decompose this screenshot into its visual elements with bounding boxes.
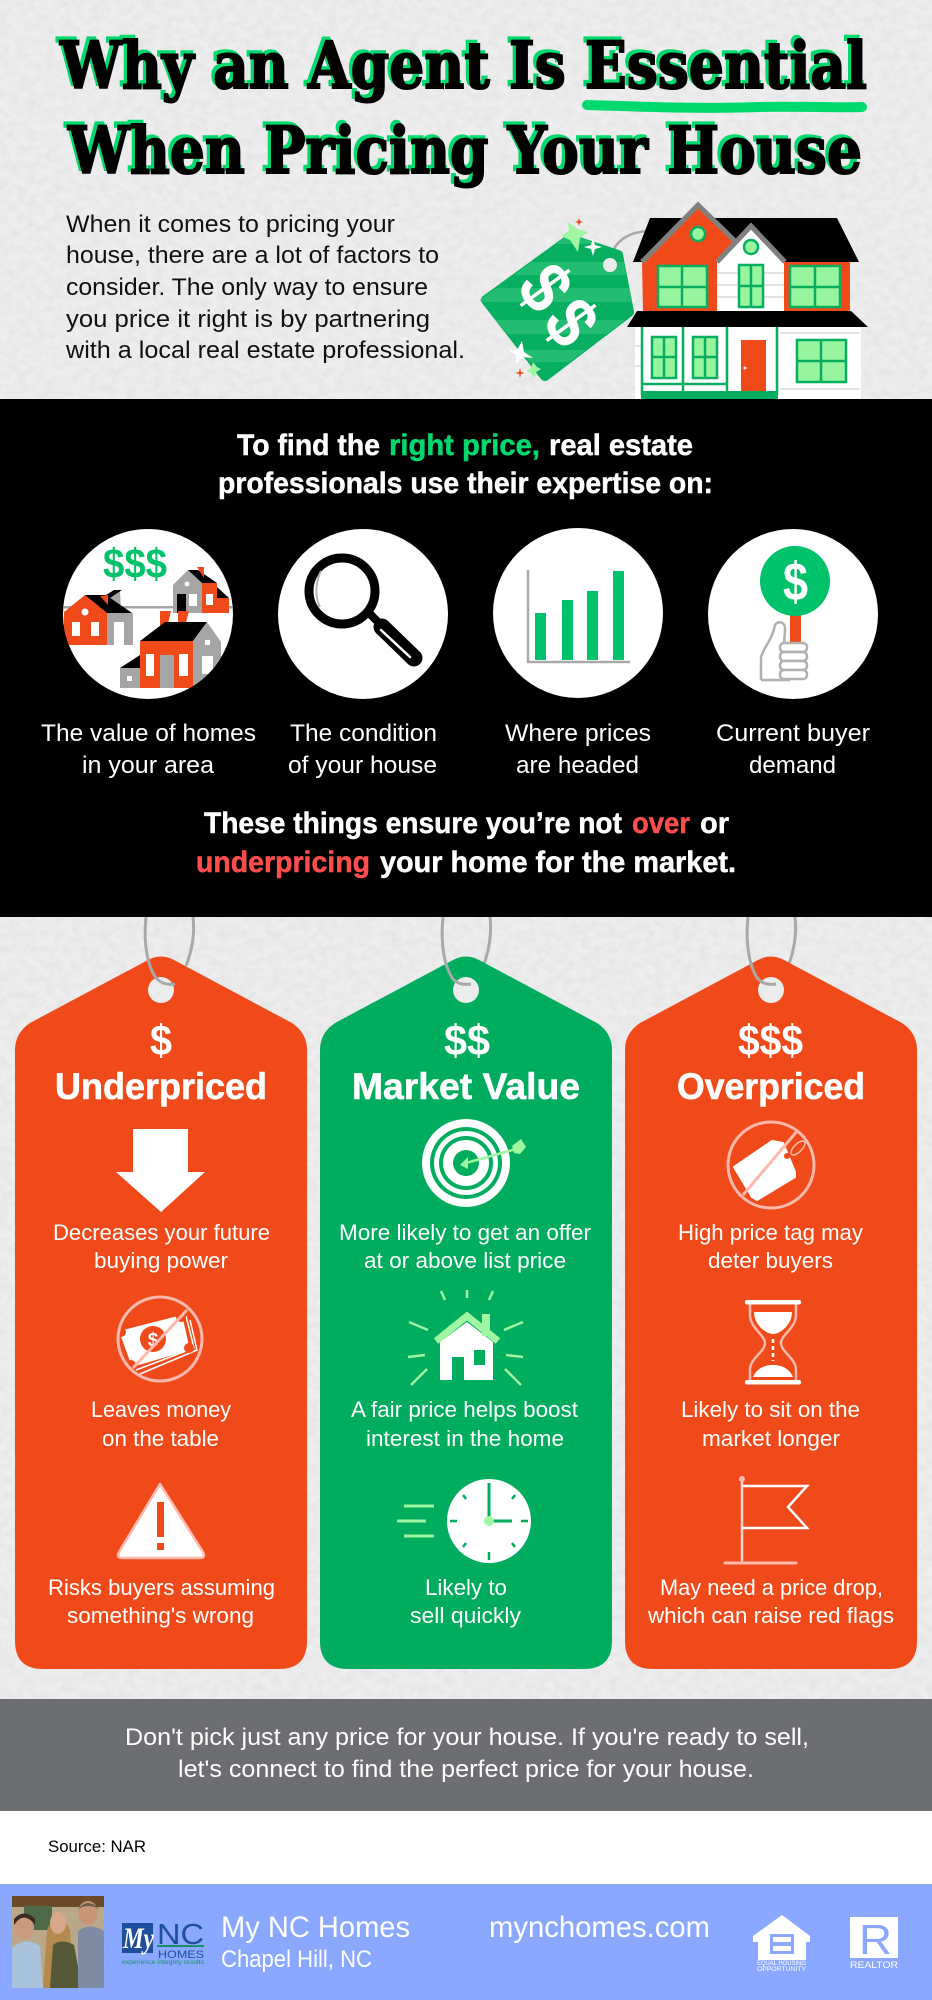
website: mynchomes.com bbox=[489, 1911, 710, 1944]
company logo bbox=[122, 1919, 204, 1966]
intro paragraph: with a local real estate professional. bbox=[65, 337, 465, 364]
icon: crossed out price tag bbox=[728, 1122, 814, 1208]
point 2 bbox=[681, 1397, 860, 1451]
company logo: experience·integrity·results bbox=[122, 1960, 204, 1966]
point 3: which can raise red flags bbox=[647, 1603, 894, 1628]
point 1 bbox=[53, 1220, 270, 1273]
point 3: Risks buyers assuming bbox=[48, 1575, 275, 1600]
company name: My NC Homes bbox=[221, 1911, 410, 1944]
panel: expertise bbox=[0, 399, 932, 917]
label bbox=[41, 720, 256, 779]
point 2 bbox=[91, 1397, 231, 1451]
label: are headed bbox=[516, 752, 639, 779]
heading: To find the bbox=[237, 429, 380, 462]
point 2: on the table bbox=[102, 1426, 219, 1451]
icon: equal housing opportunity bbox=[753, 1915, 810, 1973]
intro paragraph: consider. The only way to ensure bbox=[66, 274, 428, 301]
icon: hourglass bbox=[745, 1300, 801, 1384]
point 1: deter buyers bbox=[708, 1248, 833, 1273]
point 1: Decreases your future bbox=[53, 1220, 270, 1245]
source note: Source: NAR bbox=[48, 1837, 146, 1856]
point 2: interest in the home bbox=[366, 1426, 564, 1451]
call to action band: Don't pick just any price for your house. If you're ready to sell, bbox=[125, 1724, 809, 1751]
point 1 bbox=[678, 1220, 863, 1273]
icon: equal housing opportunity: EQUAL HOUSING bbox=[757, 1961, 806, 1967]
point 3: May need a price drop, bbox=[660, 1575, 883, 1600]
icon: clock with speed lines bbox=[397, 1479, 531, 1563]
price symbol: $$ bbox=[444, 1017, 490, 1065]
icon: neighbourhood homes bbox=[60, 529, 240, 699]
icon: hand holding dollar sign: $ bbox=[783, 552, 808, 612]
icon: warning triangle bbox=[118, 1484, 204, 1558]
location: Chapel Hill, NC bbox=[221, 1946, 372, 1973]
closing statement: over bbox=[632, 807, 690, 840]
heading: Underpriced bbox=[55, 1066, 267, 1107]
lower windows bbox=[652, 337, 846, 382]
point 3 bbox=[48, 1575, 275, 1628]
company logo: HOMES bbox=[158, 1949, 204, 1961]
icon: magnifying glass bbox=[278, 529, 448, 699]
point 2: A fair price helps boost bbox=[351, 1397, 578, 1422]
icon: crossed out money bbox=[116, 1297, 202, 1381]
icon: hand holding dollar sign bbox=[708, 529, 878, 699]
call to action band bbox=[0, 1699, 932, 1811]
label bbox=[716, 720, 870, 779]
icon: glowing house bbox=[408, 1290, 523, 1385]
footer band bbox=[0, 1884, 932, 2000]
heading: real estate bbox=[549, 429, 693, 462]
heading: Overpriced bbox=[677, 1066, 865, 1107]
title underline bbox=[587, 105, 862, 108]
point 3 bbox=[410, 1575, 521, 1628]
point 3: something's wrong bbox=[67, 1603, 254, 1628]
illustration: house bbox=[627, 205, 868, 400]
icon: realtor mark: R bbox=[859, 1916, 892, 1963]
label: demand bbox=[749, 752, 836, 779]
icon: target with arrow bbox=[422, 1119, 526, 1207]
point 3 bbox=[647, 1575, 894, 1628]
heading: professionals use their expertise on: bbox=[218, 467, 713, 500]
label: The value of homes bbox=[41, 720, 256, 747]
upper windows bbox=[658, 265, 840, 307]
icon: realtor mark bbox=[850, 1916, 899, 1970]
point 2: market longer bbox=[702, 1426, 840, 1451]
point 1 bbox=[339, 1220, 591, 1273]
point 2 bbox=[351, 1397, 578, 1451]
intro paragraph bbox=[65, 211, 465, 364]
icon: bar chart bbox=[493, 528, 663, 698]
illustration: price tag: $ bbox=[501, 248, 590, 326]
company logo: My bbox=[122, 1922, 155, 1955]
label: The condition bbox=[290, 720, 437, 747]
price symbol: $$$ bbox=[738, 1017, 803, 1065]
label bbox=[288, 720, 437, 779]
icon: red flag bbox=[725, 1476, 807, 1563]
closing statement: These things ensure you’re not bbox=[204, 807, 622, 840]
icon: realtor mark: REALTOR bbox=[850, 1960, 899, 1970]
point 1: at or above list price bbox=[364, 1248, 566, 1273]
intro paragraph: you price it right is by partnering bbox=[66, 306, 430, 333]
heading: Market Value bbox=[352, 1066, 580, 1107]
intro paragraph: When it comes to pricing your bbox=[66, 211, 395, 238]
title bbox=[56, 25, 867, 189]
point 1: High price tag may bbox=[678, 1220, 863, 1245]
call to action band: let's connect to find the perfect price for your house. bbox=[178, 1756, 754, 1783]
point 3: sell quickly bbox=[410, 1603, 521, 1628]
agent photo bbox=[12, 1896, 104, 1988]
point 1: buying power bbox=[94, 1248, 228, 1273]
panel: market value tag bbox=[320, 917, 612, 1669]
label: of your house bbox=[288, 752, 437, 779]
heading: right price, bbox=[389, 429, 540, 462]
source note bbox=[0, 1811, 932, 1884]
point 2: Likely to sit on the bbox=[681, 1397, 860, 1422]
closing statement: or bbox=[700, 807, 729, 840]
label: Current buyer bbox=[716, 720, 870, 747]
illustration: price tag: $ bbox=[527, 283, 616, 361]
illustration: price tag bbox=[470, 218, 648, 378]
intro paragraph: house, there are a lot of factors to bbox=[66, 242, 439, 269]
price symbol: $ bbox=[150, 1017, 172, 1065]
point 2: Leaves money bbox=[91, 1397, 231, 1422]
closing statement: your home for the market. bbox=[380, 846, 736, 879]
panel: overpriced tag bbox=[625, 917, 917, 1669]
panel: underpriced tag bbox=[15, 917, 307, 1669]
closing statement bbox=[196, 807, 736, 879]
label: in your area bbox=[82, 752, 215, 779]
icon: crossed out money: $ bbox=[148, 1330, 159, 1351]
label: Where prices bbox=[505, 720, 651, 747]
icon: down arrow bbox=[116, 1129, 205, 1212]
point 1: More likely to get an offer bbox=[339, 1220, 591, 1245]
label bbox=[505, 720, 651, 779]
point 3: Likely to bbox=[425, 1575, 507, 1600]
company logo: NC bbox=[157, 1919, 204, 1951]
icon: neighbourhood homes: $$$ bbox=[103, 540, 167, 587]
closing statement: underpricing bbox=[196, 846, 370, 879]
heading bbox=[218, 429, 713, 500]
icon: equal housing opportunity: OPPORTUNITY bbox=[757, 1967, 806, 1973]
